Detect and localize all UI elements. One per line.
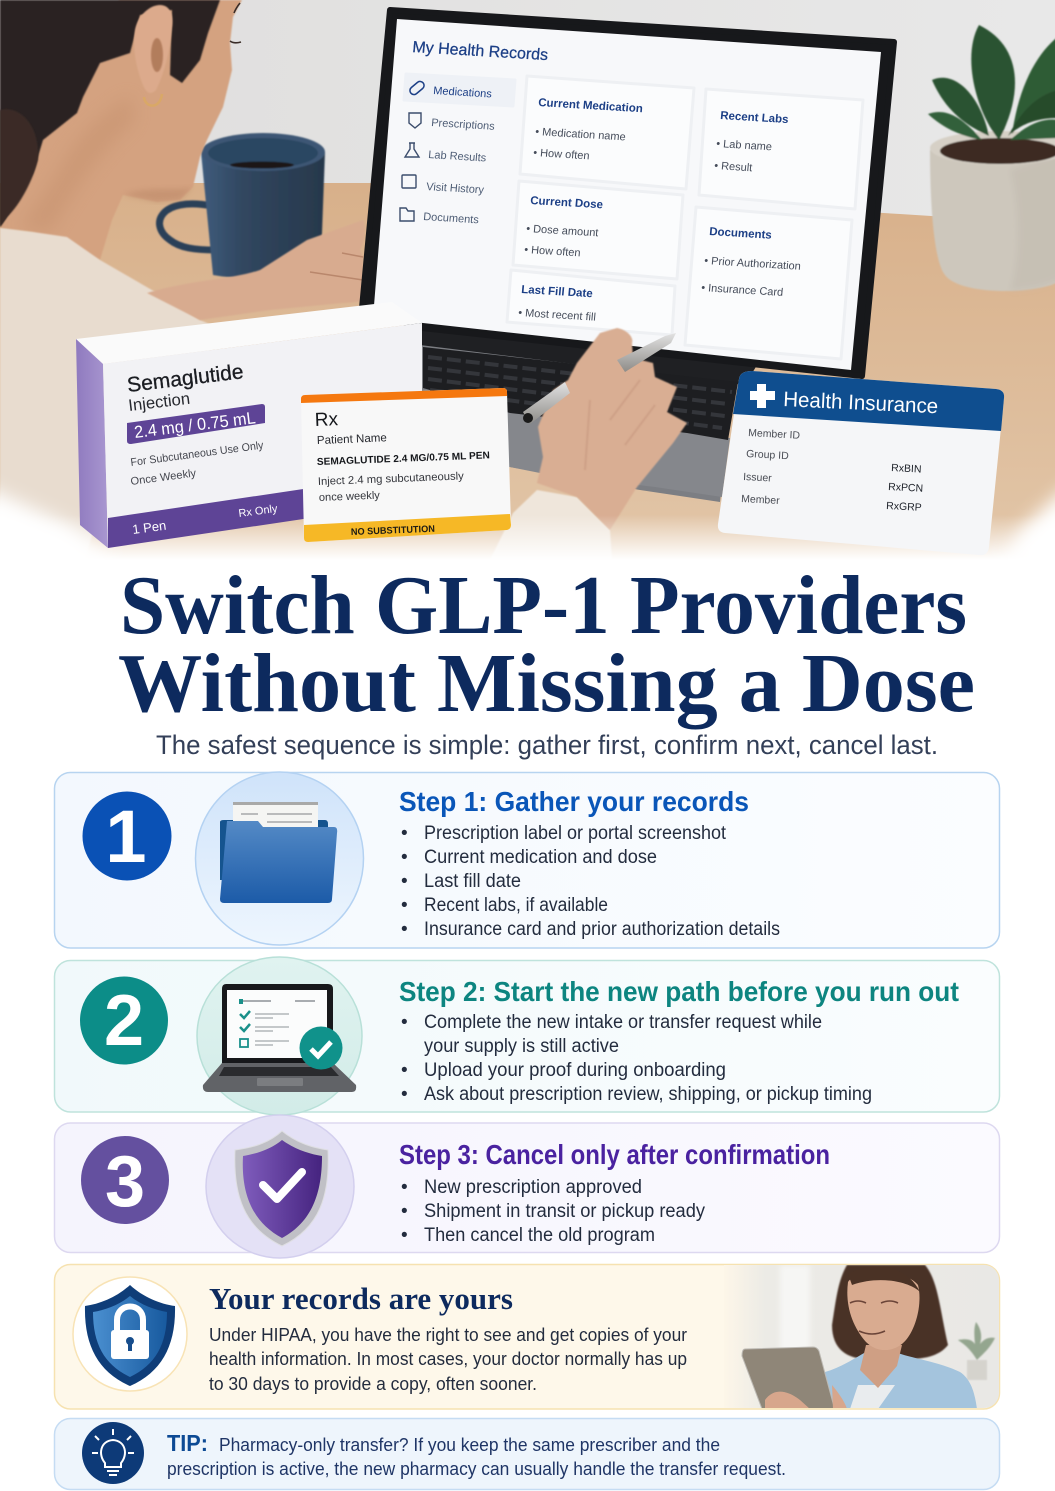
card header bbox=[733, 371, 1004, 431]
card: documents: • Prior Authorization bbox=[704, 255, 801, 273]
card fields left bbox=[741, 427, 801, 507]
wooden desk bbox=[0, 183, 1055, 560]
tip text: Pharmacy-only transfer? If you keep the same prescriber and the bbox=[219, 1435, 720, 1455]
tip text bbox=[167, 1435, 786, 1479]
card: recent labs: • Result bbox=[714, 160, 753, 174]
sleeve bbox=[490, 490, 612, 560]
card: current medication bbox=[520, 76, 694, 189]
prescription label bbox=[301, 388, 511, 542]
card: documents: Documents bbox=[709, 226, 772, 242]
step 3 list: Shipment in transit or pickup ready bbox=[424, 1201, 705, 1222]
step 1 list: Prescription label or portal screenshot bbox=[424, 823, 727, 844]
number 3: 3 bbox=[105, 1142, 145, 1222]
palm rest bbox=[500, 410, 730, 497]
orange strip bbox=[301, 388, 507, 403]
photo: woman with tablet bbox=[724, 1265, 999, 1409]
icon: folder with documents bbox=[196, 772, 364, 945]
icon: pill bbox=[409, 80, 425, 96]
card: last fill date: Last Fill Date bbox=[521, 284, 593, 300]
screen title: My Health Records bbox=[412, 39, 549, 64]
earring bbox=[144, 94, 162, 106]
step 1 list: Last fill date bbox=[424, 871, 521, 892]
card fields right: RxPCN bbox=[888, 481, 923, 495]
number 1: 1 bbox=[105, 795, 147, 878]
icon: light bulb bbox=[82, 1422, 144, 1484]
sidebar menu: Lab Results bbox=[428, 149, 487, 164]
step 2 list: Ask about prescription review, shipping, or pickup timing bbox=[424, 1084, 872, 1105]
wall bbox=[0, 0, 1055, 216]
keys bbox=[428, 357, 732, 428]
card: recent labs bbox=[699, 89, 863, 209]
yellow strip bbox=[304, 514, 511, 542]
step 2 list bbox=[401, 1012, 872, 1105]
pen count: 1 Pen bbox=[131, 518, 167, 537]
icon: medical cross bbox=[750, 384, 775, 408]
laptop bbox=[362, 10, 894, 502]
step 1 heading: Step 1: Gather your records bbox=[399, 786, 749, 817]
hands bbox=[765, 1385, 847, 1409]
hand shadows bbox=[310, 253, 363, 280]
step 2 list: • bbox=[401, 1012, 408, 1033]
bottom fade to white bbox=[0, 515, 1055, 560]
icon: laptop with checklist bbox=[197, 957, 362, 1115]
step 1 list: • bbox=[401, 847, 408, 868]
sidebar menu bbox=[423, 85, 496, 226]
step 1 list: • bbox=[401, 871, 408, 892]
directions line two: once weekly bbox=[319, 490, 381, 504]
card: current dose: Current Dose bbox=[530, 195, 603, 211]
step 3 list: • bbox=[401, 1201, 408, 1222]
card body bbox=[718, 371, 1004, 555]
title: Switch GLP-1 Providers bbox=[120, 559, 967, 652]
keyboard bbox=[423, 347, 738, 440]
step 1 list: Recent labs, if available bbox=[424, 895, 608, 916]
card: recent labs: Recent Labs bbox=[720, 110, 789, 126]
panel: step 2 bbox=[54, 957, 1000, 1115]
icon: purple shield with check bbox=[206, 1115, 354, 1258]
step 3 list: New prescription approved bbox=[424, 1177, 642, 1198]
number 2: 2 bbox=[104, 981, 144, 1061]
plant pot bbox=[930, 145, 1055, 291]
sidebar highlight bbox=[404, 74, 515, 106]
records heading: Your records are yours bbox=[209, 1281, 513, 1316]
box top bbox=[76, 302, 422, 364]
panel: step 1 bbox=[54, 772, 1000, 948]
resting hand bbox=[147, 234, 363, 320]
hair bbox=[0, 0, 220, 227]
product name: Semaglutide bbox=[126, 360, 245, 397]
neck shadow bbox=[41, 116, 120, 218]
card: last fill date: • Most recent fill bbox=[518, 307, 596, 324]
background plant bbox=[958, 1322, 995, 1380]
injection label: Injection bbox=[127, 390, 191, 415]
left corner fade bbox=[0, 485, 120, 570]
records body: Under HIPAA, you have the right to see and get copies of your bbox=[209, 1325, 687, 1345]
icon: shield bbox=[409, 113, 421, 128]
neck bbox=[860, 1345, 902, 1388]
face and neck bbox=[0, 0, 242, 260]
records body: health information. In most cases, your doctor normally has up bbox=[209, 1349, 687, 1369]
ear bbox=[134, 5, 172, 93]
number 2 bbox=[80, 976, 168, 1064]
hair bbox=[832, 1265, 948, 1359]
eyelash and brow bbox=[230, 3, 241, 43]
facial features bbox=[850, 1301, 898, 1334]
writing hand bbox=[537, 328, 687, 530]
tip label: TIP: bbox=[167, 1430, 208, 1456]
hand creases bbox=[585, 380, 655, 470]
icon: lock shield bbox=[73, 1277, 187, 1391]
step 2 heading: Step 2: Start the new path before you run out bbox=[399, 976, 959, 1007]
rx only: Rx Only bbox=[238, 503, 279, 520]
step 2 list: • bbox=[401, 1060, 408, 1081]
step 1 list: • bbox=[401, 919, 408, 940]
card: documents bbox=[685, 207, 852, 359]
records body bbox=[209, 1325, 687, 1394]
sidebar menu: Medications bbox=[433, 85, 493, 101]
card: current dose: • How often bbox=[524, 244, 581, 259]
face bbox=[847, 1273, 920, 1350]
panel: your records are yours bbox=[54, 1264, 1000, 1409]
step 3 list: Then cancel the old program bbox=[424, 1225, 655, 1246]
title bbox=[118, 559, 975, 730]
patient name: Patient Name bbox=[317, 432, 387, 447]
sidebar menu: Prescriptions bbox=[431, 117, 496, 133]
step 3 list: • bbox=[401, 1177, 408, 1198]
hinge bbox=[422, 331, 756, 384]
card fields right bbox=[886, 462, 923, 514]
records body: to 30 days to provide a copy, often sooner. bbox=[209, 1374, 537, 1394]
card fields right: RxGRP bbox=[886, 500, 922, 514]
card: current medication: • How often bbox=[533, 147, 590, 162]
box purple band bbox=[108, 488, 310, 548]
panel: tip bbox=[54, 1418, 1000, 1490]
card fields left: Member ID bbox=[748, 427, 801, 442]
plant bbox=[928, 25, 1055, 291]
hero photo: desk scene bbox=[0, 0, 1055, 570]
woman bbox=[0, 0, 375, 560]
title: Without Missing a Dose bbox=[118, 637, 975, 730]
sidebar menu: Documents bbox=[423, 211, 480, 226]
step 2 list: Upload your proof during onboarding bbox=[424, 1060, 726, 1081]
step 1 list bbox=[401, 823, 780, 940]
screen bbox=[373, 19, 881, 370]
number 1 bbox=[82, 792, 172, 880]
card: recent labs: • Lab name bbox=[716, 138, 772, 153]
bezel bbox=[362, 10, 894, 376]
mug body bbox=[201, 152, 325, 278]
icon: calendar bbox=[402, 175, 416, 188]
card: current dose bbox=[513, 181, 683, 279]
ear shadow bbox=[151, 38, 163, 72]
tablet bbox=[742, 1347, 835, 1409]
card fields right: RxBIN bbox=[891, 462, 922, 476]
insurance card bbox=[718, 371, 1004, 555]
icon: folder bbox=[400, 208, 414, 221]
card: last fill date bbox=[507, 270, 675, 335]
card: current medication: • Medication name bbox=[535, 126, 626, 143]
sidebar menu: Visit History bbox=[426, 181, 485, 196]
step 3 list bbox=[401, 1177, 705, 1246]
number 3 bbox=[81, 1136, 169, 1224]
step 2 list: • bbox=[401, 1084, 408, 1105]
coffee mug bbox=[160, 133, 325, 278]
step 3 list: • bbox=[401, 1225, 408, 1246]
card fields left: Member bbox=[741, 493, 780, 507]
white undershirt bbox=[850, 1385, 895, 1409]
step 1 list: Current medication and dose bbox=[424, 847, 657, 868]
mug handle bbox=[160, 204, 216, 250]
no substitution: NO SUBSTITUTION bbox=[351, 524, 435, 538]
sweater bbox=[0, 227, 210, 542]
dose pill bbox=[127, 404, 265, 444]
subtitle: The safest sequence is simple: gather first, confirm next, cancel last. bbox=[156, 730, 938, 760]
step 2 list: Complete the new intake or transfer request while bbox=[424, 1012, 822, 1033]
blue shirt bbox=[825, 1352, 977, 1409]
card fields left: Issuer bbox=[743, 471, 773, 485]
pen bbox=[523, 333, 676, 424]
box front bbox=[103, 323, 422, 548]
panel: step 3 bbox=[54, 1115, 1000, 1258]
step 1 list: Insurance card and prior authorization details bbox=[424, 919, 780, 940]
card: documents: • Insurance Card bbox=[701, 282, 784, 299]
card: current dose: • Dose amount bbox=[526, 223, 599, 239]
jaw shadow bbox=[133, 189, 186, 202]
right corner fade bbox=[1000, 480, 1055, 570]
medicine box bbox=[76, 302, 422, 548]
rx heading: Rx bbox=[314, 409, 339, 431]
step 3 heading: Step 3: Cancel only after confirmation bbox=[399, 1139, 830, 1170]
card title: Health Insurance bbox=[783, 388, 939, 418]
hair bun bbox=[0, 109, 38, 227]
usage text: For Subcutaneous Use Only bbox=[130, 440, 265, 469]
card: current medication: Current Medication bbox=[538, 97, 643, 115]
step 2 list: your supply is still active bbox=[424, 1036, 619, 1057]
directions: Inject 2.4 mg subcutaneously bbox=[318, 470, 465, 488]
card fields left: Group ID bbox=[746, 448, 789, 462]
laptop base bbox=[422, 345, 738, 502]
icon: flask bbox=[405, 143, 419, 157]
tip text: prescription is active, the new pharmacy can usually handle the transfer request. bbox=[167, 1459, 786, 1479]
dose text: 2.4 mg / 0.75 mL bbox=[133, 408, 257, 442]
box side bbox=[76, 339, 108, 548]
drug line: SEMAGLUTIDE 2.4 MG/0.75 ML PEN bbox=[317, 450, 490, 468]
label card bbox=[301, 388, 511, 542]
weekly text: Once Weekly bbox=[130, 467, 197, 488]
step 1 list: • bbox=[401, 823, 408, 844]
step 1 list: • bbox=[401, 895, 408, 916]
